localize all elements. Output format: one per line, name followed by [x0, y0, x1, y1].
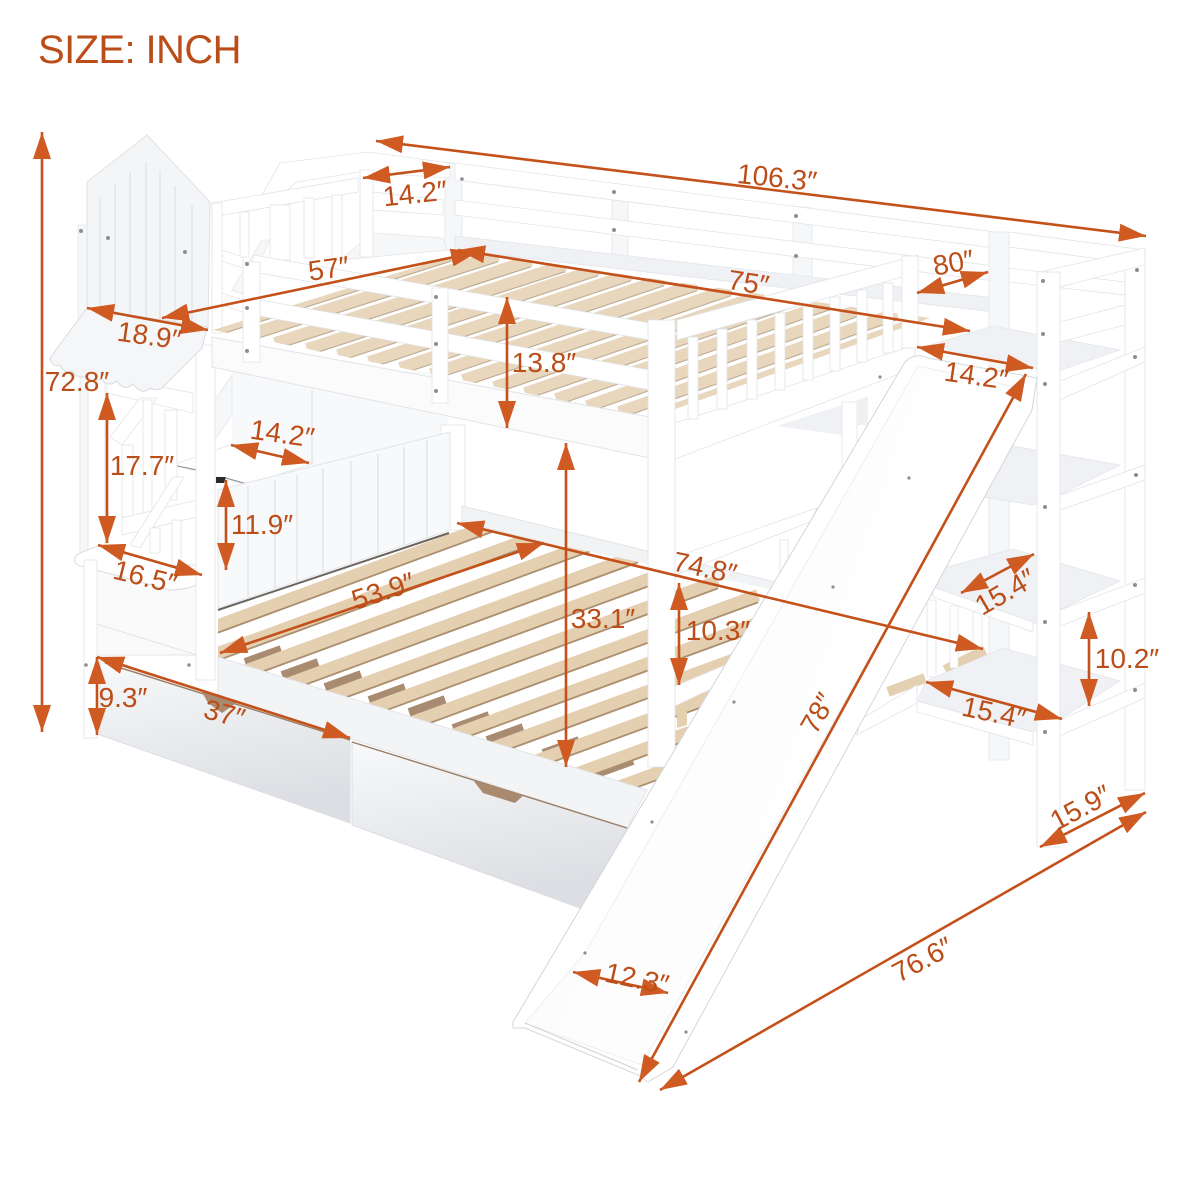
dimension: tower 18.9: 18.9″ [115, 316, 183, 355]
headboard panel [218, 432, 450, 610]
dimension: overall length 106.3: 106.3″ [736, 158, 818, 197]
dimension: shelf spacing 10.2 [1089, 612, 1159, 706]
dimension: stair step 14.2 [231, 414, 316, 463]
right back post [989, 232, 1009, 760]
dimension: upper width 57: 57″ [306, 250, 351, 287]
dimension: step height 11.9: 11.9″ [231, 509, 293, 540]
dimension: lower length 74.8: 74.8″ [670, 546, 740, 590]
dimension: right platform 14.2 [917, 347, 1033, 395]
dimension: drawer width 37: 37″ [201, 694, 248, 734]
dimension: shelf spacing 10.2: 10.2″ [1095, 643, 1159, 674]
dimension: lower rail 10.3: 10.3″ [686, 615, 750, 646]
upper mattress slats [213, 250, 930, 424]
title: SIZE: INCH [38, 28, 241, 72]
dimension: upper width 57 [162, 250, 478, 318]
dimension: slide length 78: 78″ [794, 688, 842, 739]
dimension: top platform 14.2 [363, 167, 450, 212]
dimension: landing 16.5 [98, 545, 202, 600]
dimension: lower width 53.9: 53.9″ [348, 566, 419, 616]
lower front bed rail [218, 657, 647, 828]
dimension: drawer height 9.3: 9.3″ [99, 682, 148, 713]
dimension: stair step 14.2: 14.2″ [248, 414, 316, 453]
dimension: lower width 53.9 [220, 543, 544, 653]
dimension: full width 76.6 [660, 812, 1146, 1090]
dimension: shelf 15.4 lower: 15.4″ [959, 691, 1029, 735]
roof awning [50, 308, 207, 391]
left stair structure [80, 320, 232, 565]
dimension arrows and labels [42, 132, 1159, 1090]
dimension: top platform 14.2: 14.2″ [381, 175, 449, 212]
dimension: tower 18.9 [87, 308, 208, 355]
dimension: guard rail 13.8: 13.8″ [512, 347, 576, 378]
tower panel [78, 135, 210, 328]
ladder end frame [1037, 248, 1145, 847]
upper head end rails [212, 152, 450, 333]
dimension: step height 11.9 [226, 480, 293, 570]
dimension: drawer height 9.3 [97, 657, 148, 735]
right back rails [1009, 232, 1145, 295]
dimension: ladder depth 15.9 [1040, 779, 1145, 847]
dimension: slide width 12.3: 12.3″ [602, 957, 672, 1001]
upper front bed rail [212, 255, 650, 458]
upper bunk back guard rails [445, 162, 995, 312]
dimension: ladder depth 15.9: 15.9″ [1045, 779, 1116, 836]
foot end upper rails and lower rail [650, 255, 918, 728]
dimension: overall length 106.3 [376, 141, 1146, 236]
shelves [917, 326, 1120, 745]
slide [513, 356, 1037, 1082]
dimension: slide length 78 [639, 374, 1026, 1082]
main stair post [196, 345, 215, 680]
dimension: lower length 74.8 [457, 523, 983, 649]
lower mattress slats [218, 528, 770, 788]
storage steps wall below upper bunk [173, 372, 465, 530]
dimension: 80: 80″ [930, 244, 976, 281]
dimension: full width 76.6: 76.6″ [887, 931, 958, 988]
dimension: right platform 14.2: 14.2″ [942, 356, 1010, 395]
dimension: upper length 75 [458, 250, 970, 331]
dimension: 80 [917, 244, 988, 293]
dimension: shelf 15.4 lower [926, 682, 1062, 735]
lower right rails behind slide [857, 600, 985, 735]
dimension: shelf 15.4 upper: 15.4″ [970, 562, 1041, 621]
dimension: stair height 17.7: 17.7″ [110, 450, 174, 481]
dimension: clearance 33.1: 33.1″ [571, 603, 635, 634]
front right upper post [648, 320, 675, 767]
drawers [100, 657, 627, 908]
dimension: lower rail 10.3 [679, 583, 750, 685]
dimension: guard rail 13.8 [507, 297, 576, 428]
dimension: overall height 72.8: 72.8″ [45, 366, 109, 397]
dimension: upper length 75: 75″ [726, 264, 771, 301]
bunk bed illustration [50, 135, 1145, 1082]
dimension: drawer width 37 [97, 657, 350, 738]
lower back rail [462, 506, 775, 598]
stair landing box [75, 545, 207, 738]
dimension: landing 16.5: 16.5″ [110, 554, 180, 600]
